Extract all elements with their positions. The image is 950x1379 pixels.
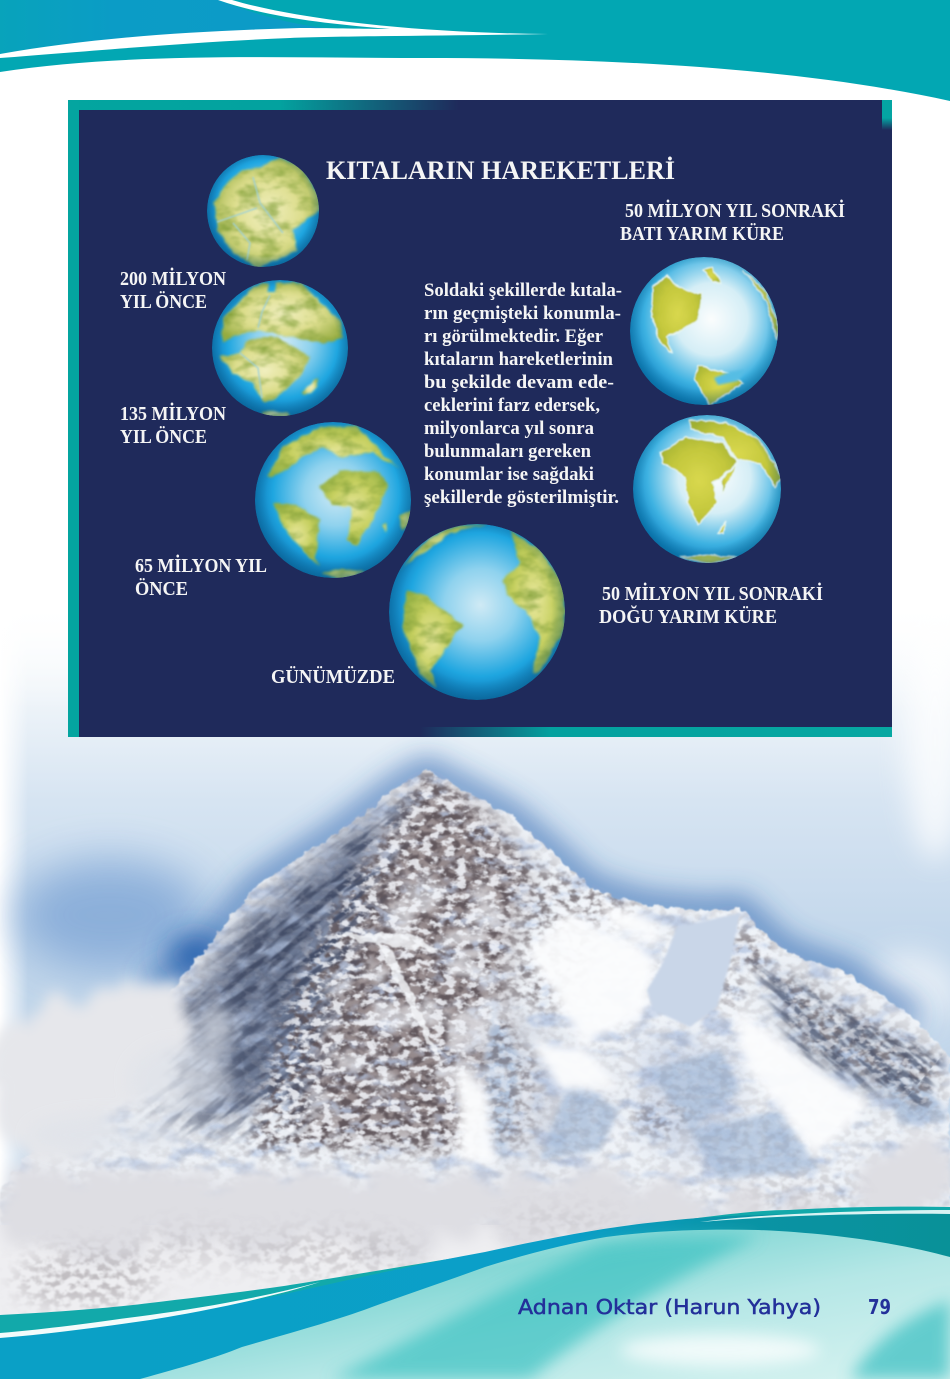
sky behind the mountain [0,600,950,1320]
teal outer wave [0,1207,950,1379]
top wave band [0,0,950,101]
body text: rı görülmektedir. Eğer [424,326,604,347]
body text: şekillerde gösterilmiştir. [424,487,619,508]
body text: ceklerini farz edersek, [424,395,600,416]
label: 135 million years ago: 135 MİLYON [120,404,226,425]
blue-grey rock streaks [140,790,420,1150]
white streak [0,0,548,58]
panel: continents movement [68,100,892,737]
left cloud mass [0,978,195,1165]
cloud veil [0,1225,950,1320]
body text [424,280,622,508]
shaded snow face [647,913,740,1027]
globe: eastern hemisphere in 50 million years [633,415,782,564]
bottom wave band [0,1207,950,1379]
snow base [0,768,950,1225]
globe: today [389,523,566,700]
snow texture [0,774,950,1216]
blue wedge [0,0,385,56]
rocks showing through cloud [8,1176,844,1312]
author credit: Adnan Oktar (Harun Yahya) [518,1295,821,1319]
mountain halo [150,770,917,1020]
body text: kıtaların hareketlerinin [424,349,613,370]
clouds [0,978,950,1320]
white streak left [0,1282,320,1338]
snow ridges [338,933,442,1062]
right accent [882,100,892,130]
white streak right [700,1210,950,1222]
large snow patches [303,866,524,1121]
low cloud band [0,1134,950,1266]
globe: 65 million years ago [255,422,412,580]
label: 65 million years ago [135,556,267,600]
white light patch [620,1334,820,1366]
body text: rın geçmişteki konumla- [424,303,621,324]
label: 200 million years ago: YIL ÖNCE [120,292,207,313]
body text: milyonlarca yıl sonra [424,418,594,439]
right turquoise [850,1300,950,1379]
globe: western hemisphere in 50 million years [630,257,779,405]
brown rock [0,770,950,1216]
label: eastern hemisphere [599,584,823,628]
label: western hemisphere: 50 MİLYON YIL SONRAKİ [625,201,845,222]
globe: 135 million years ago [212,280,348,420]
inner light wave [140,1230,950,1379]
label: western hemisphere: BATI YARIM KÜRE [620,224,784,245]
turquoise sweep [330,1236,760,1379]
label: 135 million years ago [120,404,226,448]
left accent [68,100,79,737]
snow flecks [190,770,946,1162]
cloud wisps over rock [30,1004,233,1155]
mountain [0,768,950,1225]
label: eastern hemisphere: 50 MİLYON YIL SONRAKİ [602,584,823,605]
white snow slopes [458,902,870,1165]
panel background [68,100,892,737]
blue main band [0,1213,950,1379]
label: 65 million years ago: 65 MİLYON YIL [135,556,267,577]
body text: bulunmaları gereken [424,441,591,462]
tonal shading [180,775,930,1170]
bottom accent [79,727,892,737]
label: today: GÜNÜMÜZDE [271,667,395,688]
body text: bu şekilde devam ede- [424,372,614,393]
top accent [68,100,882,110]
globe: Pangaea [207,155,320,268]
label: 200 million years ago [120,269,226,313]
label: 200 million years ago: 200 MİLYON [120,269,226,290]
body text: Soldaki şekillerde kıtala- [424,280,622,301]
teal wave [0,0,950,101]
right ridge streaks [748,961,948,1108]
label: 65 million years ago: ÖNCE [135,579,188,600]
blue shadow facets [480,1000,950,1180]
title: KITALARIN HAREKETLERİ [326,156,675,185]
label: 135 million years ago: YIL ÖNCE [120,427,207,448]
label: eastern hemisphere: DOĞU YARIM KÜRE [599,606,777,628]
body text: konumlar ise sağdaki [424,464,594,485]
label: western hemisphere [620,201,845,245]
page number: 79 [868,1295,891,1319]
